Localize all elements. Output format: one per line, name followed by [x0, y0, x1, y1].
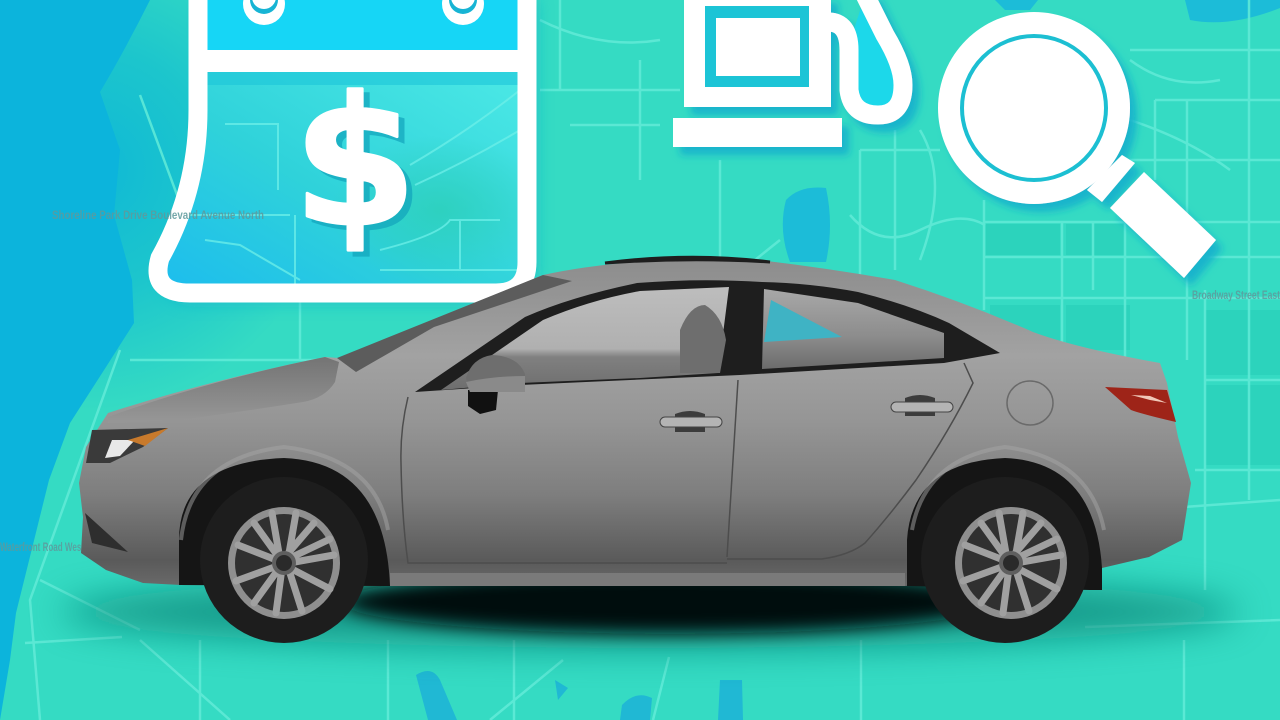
- icon: fuel pump: [673, 0, 903, 147]
- front wheel: [179, 447, 390, 643]
- calendar rings: [243, 0, 484, 25]
- dollar sign: $: [293, 59, 417, 266]
- dollar sign: $: [299, 64, 423, 271]
- hood panel: [108, 357, 339, 423]
- icon: magnifying glass: [938, 12, 1216, 278]
- reflection in rear window: [764, 300, 842, 342]
- lower ponds: [416, 671, 743, 720]
- calendar header band: [198, 0, 527, 52]
- calendar outline: [158, 0, 527, 293]
- map blocks: [986, 224, 1280, 465]
- rear wheel: [907, 447, 1104, 643]
- headlight: [86, 428, 168, 463]
- front side window: [441, 287, 729, 390]
- lake: [783, 188, 830, 262]
- window frame: [415, 280, 1000, 392]
- map labels: Shoreline Park Drive Boulevard Avenue North: [52, 208, 264, 222]
- icon: calendar with dollar sign: [158, 0, 550, 301]
- side mirror: [466, 355, 525, 414]
- map labels: [0, 208, 1280, 554]
- water: left coast: [0, 0, 150, 720]
- land tint near coast: [0, 0, 340, 420]
- roof trim: [605, 257, 770, 263]
- front grille: [85, 513, 128, 552]
- taillight: [1105, 387, 1176, 422]
- rear side window: [762, 289, 944, 369]
- door handles: [660, 395, 953, 432]
- map labels: Waterfront Road West: [0, 540, 84, 554]
- windshield: [337, 275, 572, 372]
- side sill: [390, 573, 905, 586]
- water: top right: [995, 0, 1280, 22]
- front seat headrest: [680, 305, 726, 373]
- car ground shadow: [60, 570, 1240, 648]
- fuel door: [1007, 381, 1053, 425]
- door seams: [401, 363, 973, 563]
- calendar page: [158, 0, 550, 301]
- car: [60, 257, 1240, 648]
- car body: [79, 258, 1191, 586]
